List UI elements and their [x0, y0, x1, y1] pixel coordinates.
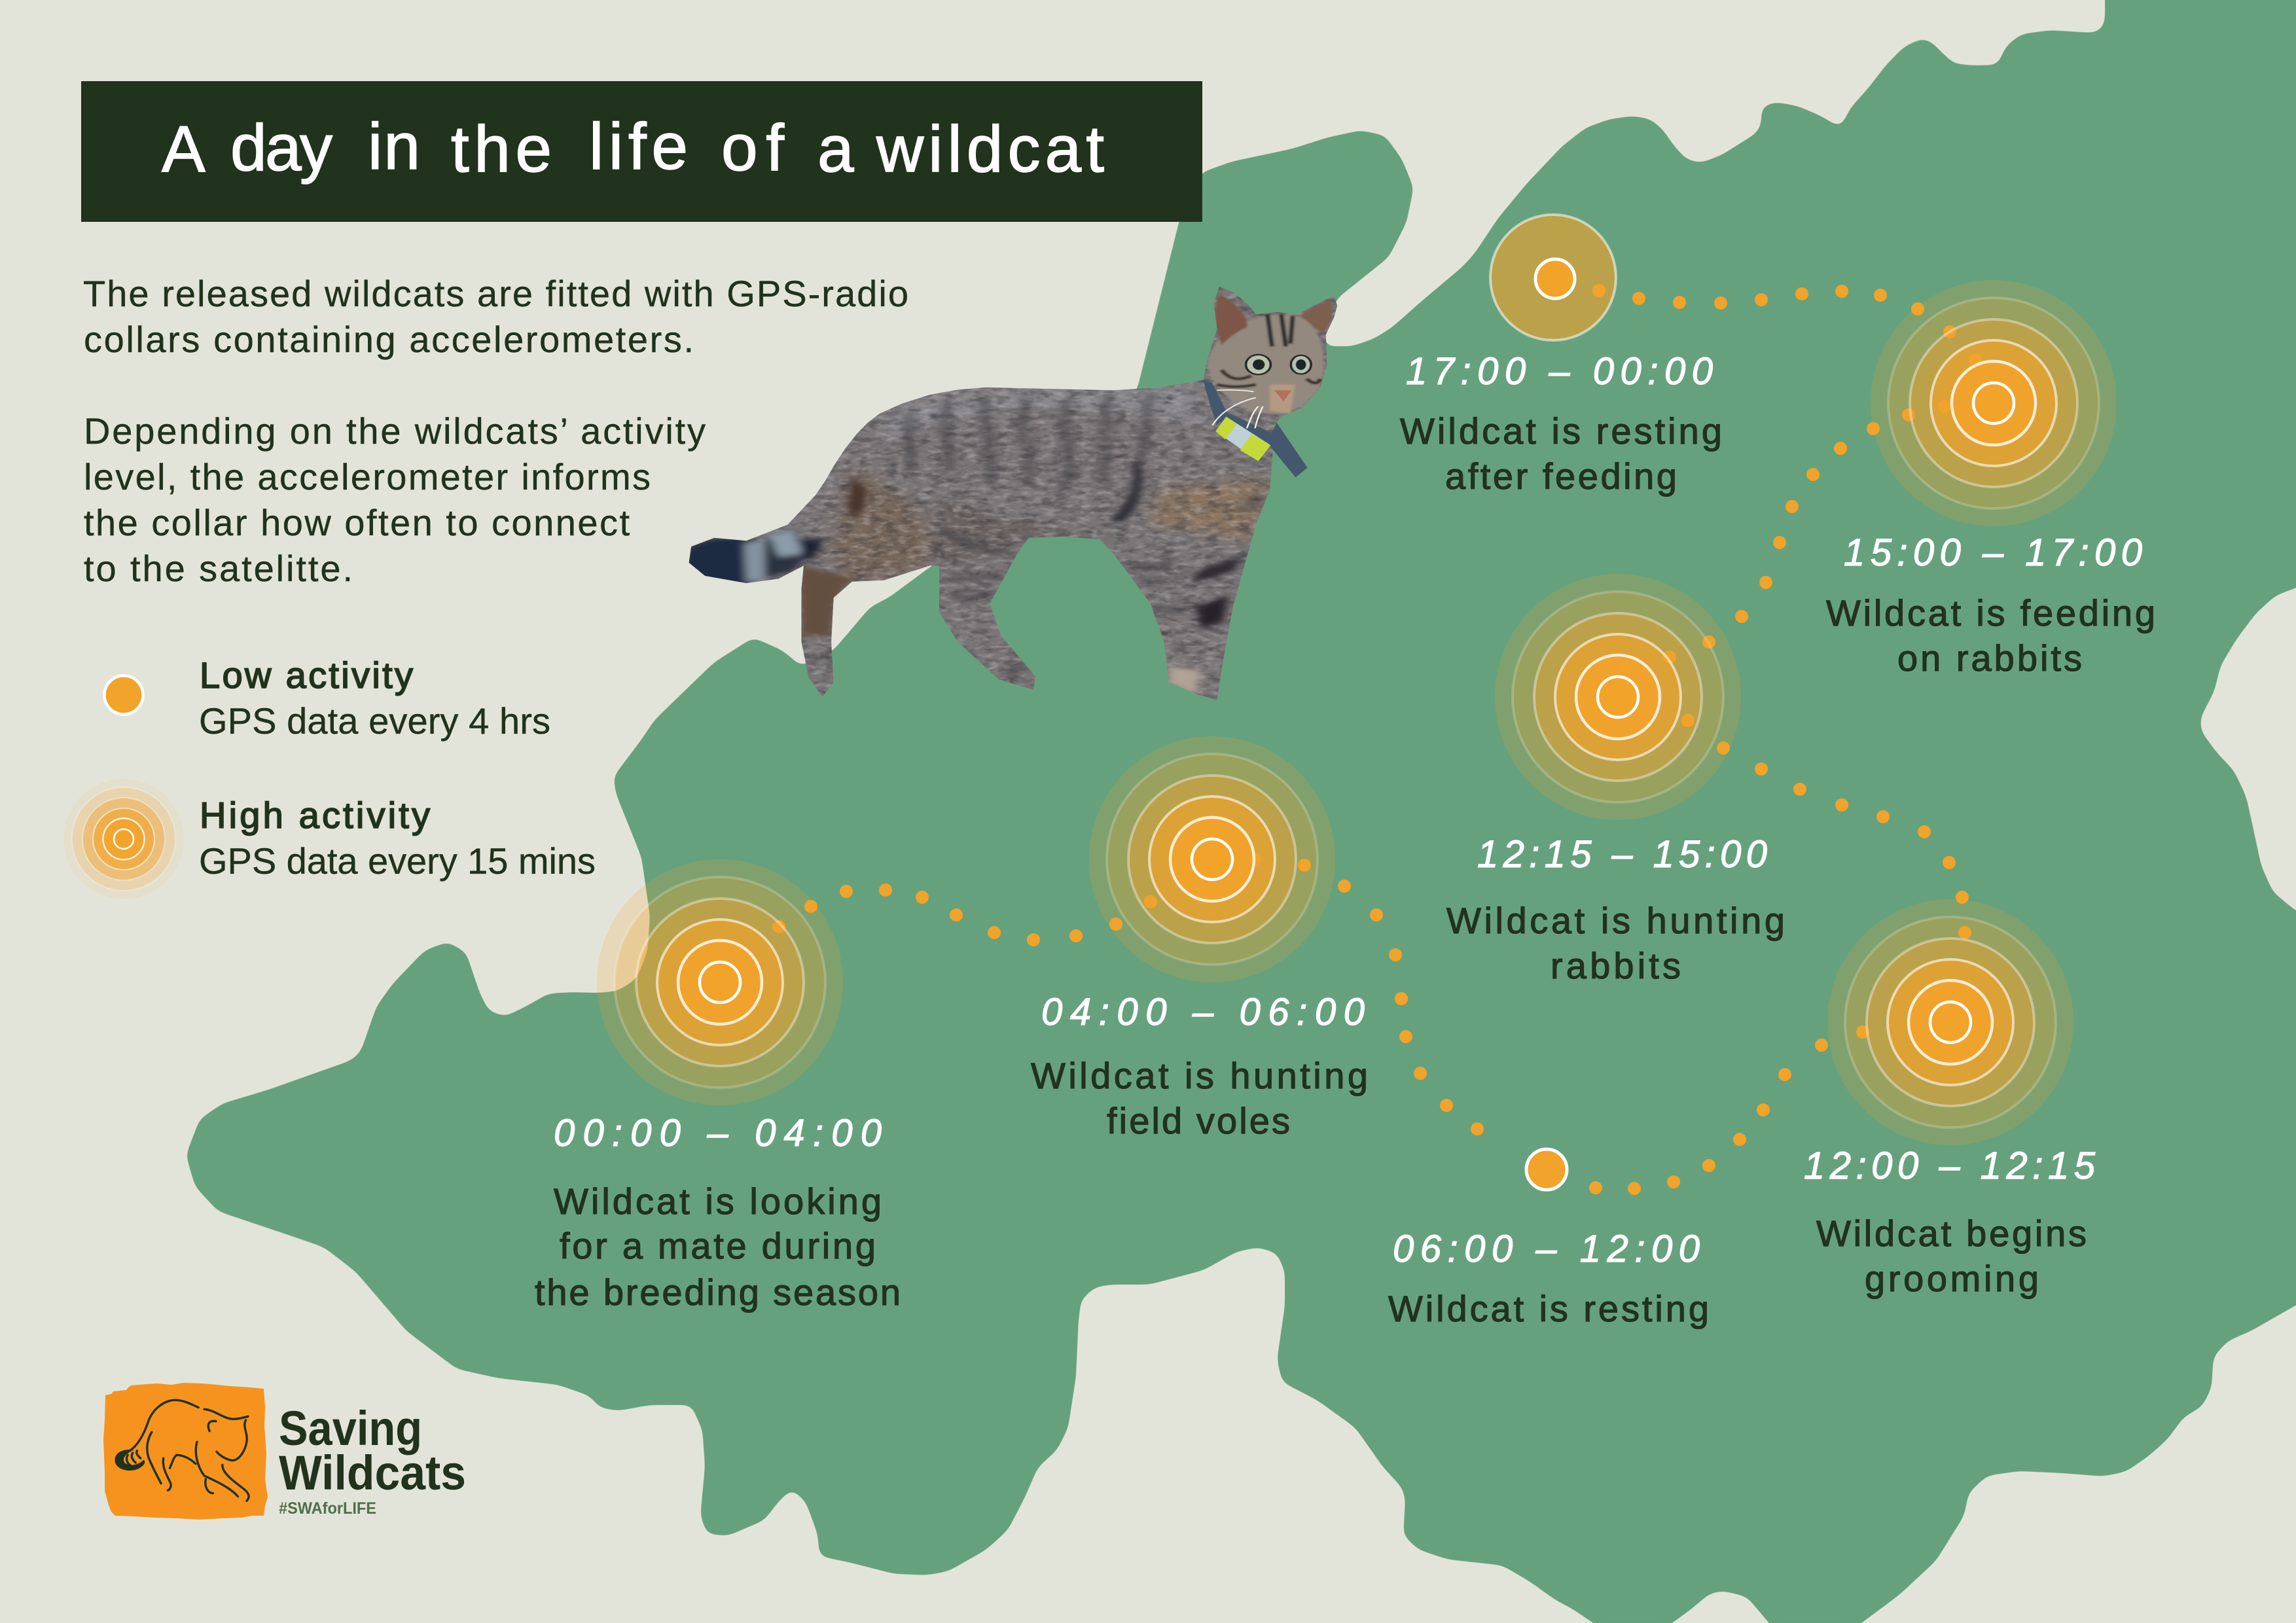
- intro text: to the satelitte.: [84, 548, 353, 589]
- time label: 12:00 – 12:15: [1804, 1145, 2096, 1187]
- intro text: collars containing accelerometers.: [84, 319, 694, 360]
- dotted route: [772, 284, 1982, 1195]
- body stripes: [811, 393, 1261, 673]
- head: [1208, 315, 1323, 414]
- logo cat line drawing: [116, 1400, 249, 1501]
- legend icon: high activity: [63, 779, 184, 899]
- title banner: life: [589, 110, 688, 183]
- time label: 12:15 – 15:00: [1477, 833, 1767, 876]
- title banner: a: [817, 113, 854, 186]
- title banner: day: [230, 111, 332, 185]
- description: [1031, 1055, 1368, 1141]
- title banner: [81, 81, 1202, 222]
- description: Wildcat is feeding: [1826, 592, 2155, 633]
- logo wordmark: [279, 1401, 466, 1518]
- logo wordmark: Wildcats: [279, 1446, 466, 1500]
- stop: 04:00 to 06:00: [1031, 736, 1368, 1141]
- description: Wildcat is resting: [1388, 1288, 1709, 1329]
- high activity marker: [597, 859, 843, 1105]
- Saving Wildcats logo: [103, 1383, 466, 1520]
- low activity marker: [1526, 1149, 1567, 1190]
- legend text: high activity: High activity: [200, 794, 430, 836]
- legend text: low activity: [199, 654, 550, 741]
- legend text: low activity: Low activity: [200, 654, 413, 696]
- high activity marker: [1871, 280, 2117, 526]
- tail: [689, 537, 760, 584]
- GPS collar tag: [1215, 417, 1270, 461]
- medium activity marker: [1490, 215, 1616, 340]
- logo wordmark: #SWAforLIFE: [279, 1499, 376, 1518]
- title banner: A: [162, 113, 206, 186]
- stop: 17:00 to 00:00: [1400, 215, 1722, 497]
- description: on rabbits: [1897, 637, 2082, 679]
- description: rabbits: [1551, 945, 1681, 986]
- high activity marker: [1495, 574, 1741, 820]
- time label: 04:00 – 06:00: [1041, 991, 1365, 1033]
- high activity marker: [1089, 736, 1335, 982]
- wildcat illustration with GPS collar: [677, 279, 1348, 706]
- description: Wildcat begins: [1816, 1213, 2087, 1254]
- description: Wildcat is hunting: [1446, 900, 1785, 941]
- intro text: Depending on the wildcats’ activity: [84, 410, 706, 452]
- whiskers: [1212, 390, 1263, 428]
- title banner: in: [368, 110, 420, 183]
- description: [1400, 410, 1722, 497]
- description: [535, 1181, 901, 1313]
- legend text: high activity: [199, 794, 596, 882]
- eyes and nose: [1246, 355, 1311, 401]
- title banner: the: [451, 113, 552, 186]
- description: grooming: [1865, 1258, 2039, 1299]
- logo badge: [103, 1383, 268, 1520]
- description: field voles: [1107, 1100, 1290, 1141]
- logo wordmark: Saving: [279, 1401, 422, 1455]
- stop: 15:00 to 17:00: [1826, 280, 2155, 679]
- high activity marker: [1827, 899, 2073, 1145]
- intro text: the collar how often to connect: [84, 502, 630, 543]
- stop: 06:00 to 12:00: [1388, 1149, 1709, 1329]
- intro text: [83, 273, 908, 589]
- stop: 12:15 to 15:00: [1446, 574, 1785, 986]
- time label: 06:00 – 12:00: [1393, 1228, 1700, 1270]
- description: [1446, 900, 1785, 986]
- description: Wildcat is looking: [554, 1181, 882, 1222]
- legend icon: low activity: [105, 675, 143, 715]
- time label: 17:00 – 00:00: [1406, 350, 1713, 393]
- intro text: level, the accelerometer informs: [84, 456, 651, 497]
- description: for a mate during: [560, 1225, 876, 1266]
- description: Wildcat is hunting: [1031, 1055, 1368, 1096]
- legend text: high activity: GPS data every 15 mins: [199, 840, 596, 882]
- stop: 00:00 to 04:00: [535, 859, 901, 1313]
- collar strap: [1203, 380, 1308, 477]
- time label: 00:00 – 04:00: [554, 1112, 882, 1154]
- title banner: wildcat: [876, 113, 1104, 186]
- description: [1816, 1213, 2087, 1299]
- legend: [63, 654, 596, 899]
- title banner: of: [721, 111, 784, 185]
- fur texture: [677, 279, 1348, 706]
- description: the breeding season: [535, 1272, 901, 1313]
- intro text: The released wildcats are fitted with GPS-radio: [83, 273, 908, 314]
- legend text: low activity: GPS data every 4 hrs: [199, 700, 550, 741]
- time label: 15:00 – 17:00: [1844, 531, 2142, 574]
- description: Wildcat is resting: [1400, 410, 1722, 452]
- description: [1826, 592, 2155, 679]
- stop: 12:00 to 12:15: [1804, 899, 2096, 1299]
- description: after feeding: [1445, 455, 1677, 497]
